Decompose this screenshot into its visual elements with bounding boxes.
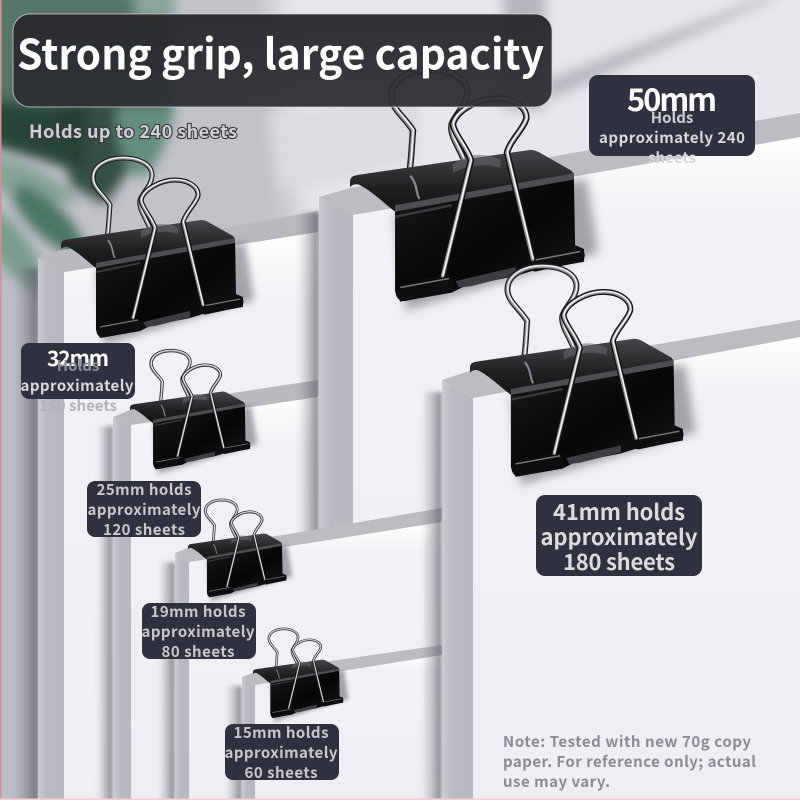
label: 19mm: approximately [142,621,255,642]
binder clip: 25mm [130,350,257,474]
note: Note: Tested with new 70g copy [503,731,751,752]
paper stack: 50mm [298,113,800,800]
binder clip: 32mm [61,158,254,345]
label: 32mm: Holds [57,355,99,376]
label: 50mm: 50mm [627,75,717,120]
paper stack: 41mm [422,320,800,800]
label: 15mm: approximately [224,742,338,763]
label: 41mm: 180 sheets [563,545,675,577]
subtitle: Holds up to 240 sheets [29,118,237,144]
label: 41mm: 41mm holds [553,495,685,527]
binder clip: 50mm [350,70,598,311]
label: 15mm: 15mm holds [234,722,328,743]
note [503,731,756,792]
paper stack: 15mm [226,645,442,800]
binder clip: 41mm [470,266,696,485]
binder clip: 19mm [188,500,292,601]
label: 19mm [142,601,256,662]
label: 25mm [87,479,201,540]
paper stack: 19mm [159,508,442,800]
binder clip: 15mm [253,629,349,721]
label: 50mm [589,75,755,168]
paper stack: 32mm [14,211,318,800]
label: 25mm: 25mm holds [96,479,192,500]
label: 15mm: 60 sheets [244,762,318,783]
note: paper. For reference only; actual [503,751,756,772]
label: 25mm: 120 sheets [103,519,185,540]
label: 50mm: approximately 240 [599,127,745,148]
paper stack: 25mm [97,380,320,800]
label: 32mm [20,343,135,416]
label: 41mm: approximately [540,520,698,552]
label: 50mm: sheets [648,147,696,168]
title panel [13,14,552,107]
label: 41mm [536,495,702,577]
label: 15mm [224,722,339,783]
label: 50mm: Holds [651,107,693,128]
label: 32mm: 32mm [47,343,109,373]
label: 19mm: 19mm holds [150,601,246,622]
blurred plant [0,0,176,295]
note: use may vary. [503,771,610,792]
title text: Strong grip, large capacity [17,22,544,82]
label: 32mm: approximately [20,375,134,396]
label: 25mm: approximately [88,499,201,520]
label: 32mm: 150 sheets [39,395,117,416]
label: 19mm: 80 sheets [162,641,234,662]
